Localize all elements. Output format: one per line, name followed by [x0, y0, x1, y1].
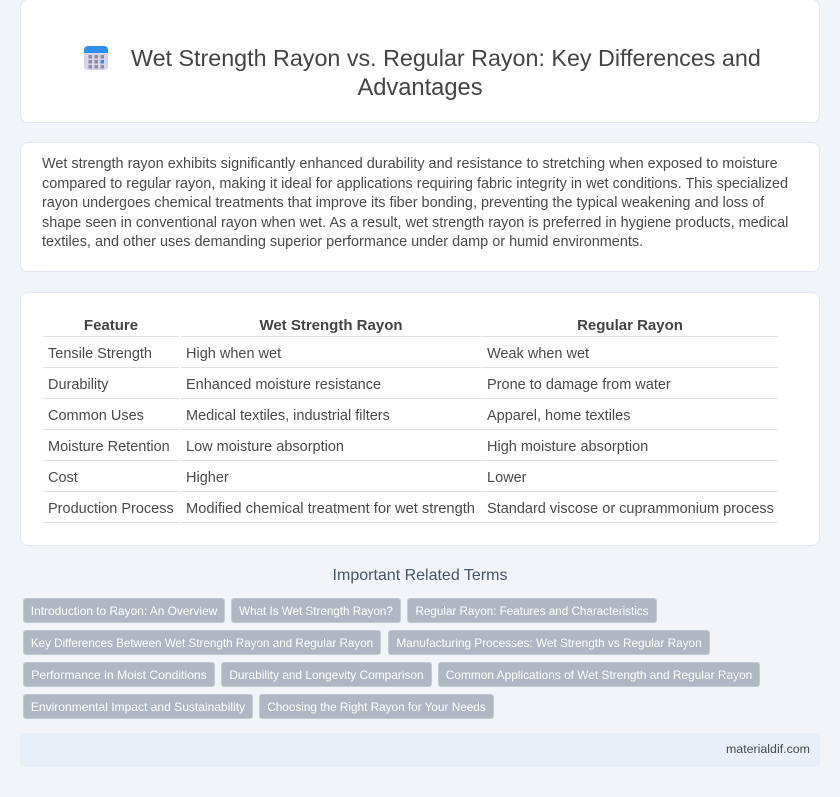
panel: header: [20, 0, 820, 123]
comparison table: Regular Rayon: [577, 317, 683, 334]
related terms tags: Choosing the Right Rayon for Your Needs: [267, 701, 486, 714]
related terms tags: Introduction to Rayon: An Overview: [31, 604, 217, 618]
panel: comparison table: [20, 292, 820, 546]
comparison table: Standard viscose or cuprammonium process: [487, 501, 774, 517]
footer bar: [20, 733, 820, 767]
comparison table: Durability: [48, 377, 108, 393]
heading: related terms: Important Related Terms: [333, 567, 507, 584]
text block: introduction: rayon undergoes chemical treatments that improve its fiber bonding, preventing the typical weakening and loss of: [42, 195, 764, 211]
title: Advantages: [357, 75, 483, 101]
comparison table: Medical textiles, industrial filters: [186, 408, 390, 424]
footer source: materialdif.com: [726, 742, 810, 756]
comparison table: Weak when wet: [487, 346, 589, 362]
related terms tags: [23, 598, 760, 719]
title: [131, 45, 761, 101]
comparison table: High when wet: [186, 346, 281, 362]
related terms tags: Environmental Impact and Sustainability: [31, 700, 245, 714]
text block: introduction: Wet strength rayon exhibits significantly enhanced durability and resistance to stretching when exposed to moisture: [42, 156, 778, 172]
icon: calendar: [84, 46, 108, 70]
comparison table: Prone to damage from water: [487, 377, 671, 393]
related terms tags: Performance in Moist Conditions: [31, 668, 207, 682]
related terms tags: Durability and Longevity Comparison: [229, 668, 424, 682]
comparison table: Tensile Strength: [48, 346, 152, 362]
comparison table: High moisture absorption: [487, 439, 648, 455]
comparison table: Low moisture absorption: [186, 439, 344, 455]
comparison table: Apparel, home textiles: [487, 408, 630, 424]
comparison table: Common Uses: [48, 408, 144, 424]
comparison table: Enhanced moisture resistance: [186, 377, 381, 393]
text block: introduction: [42, 156, 788, 250]
text block: introduction: compared to regular rayon, making it ideal for applications requiring fabric integrity in wet conditions. This specialized: [42, 176, 788, 192]
comparison table: Higher: [186, 470, 229, 486]
title: Wet Strength Rayon vs. Regular Rayon: Key Differences and: [131, 45, 761, 71]
comparison table: Wet Strength Rayon: [259, 317, 403, 334]
comparison table: Modified chemical treatment for wet strength: [186, 501, 475, 517]
related terms tags: Key Differences Between Wet Strength Rayon and Regular Rayon: [31, 637, 373, 650]
comparison table: Moisture Retention: [48, 439, 170, 455]
text block: introduction: textiles, and other uses demanding superior performance under damp or humid environments.: [42, 234, 643, 250]
related terms tags: What Is Wet Strength Rayon?: [239, 605, 393, 618]
comparison table: Production Process: [48, 501, 174, 517]
related terms tags: Regular Rayon: Features and Characteristics: [416, 605, 648, 618]
comparison table: [43, 317, 778, 523]
comparison table: Feature: [84, 317, 138, 334]
related terms tags: Common Applications of Wet Strength and Regular Rayon: [446, 668, 752, 682]
panel: introduction: [20, 142, 820, 272]
comparison table: Lower: [487, 470, 526, 486]
text block: introduction: shape seen in conventional rayon when wet. As a result, wet strength rayon is preferred in hygiene products, medical: [42, 214, 788, 230]
related terms tags: Manufacturing Processes: Wet Strength vs Regular Rayon: [396, 636, 702, 650]
comparison table: Cost: [48, 470, 78, 486]
